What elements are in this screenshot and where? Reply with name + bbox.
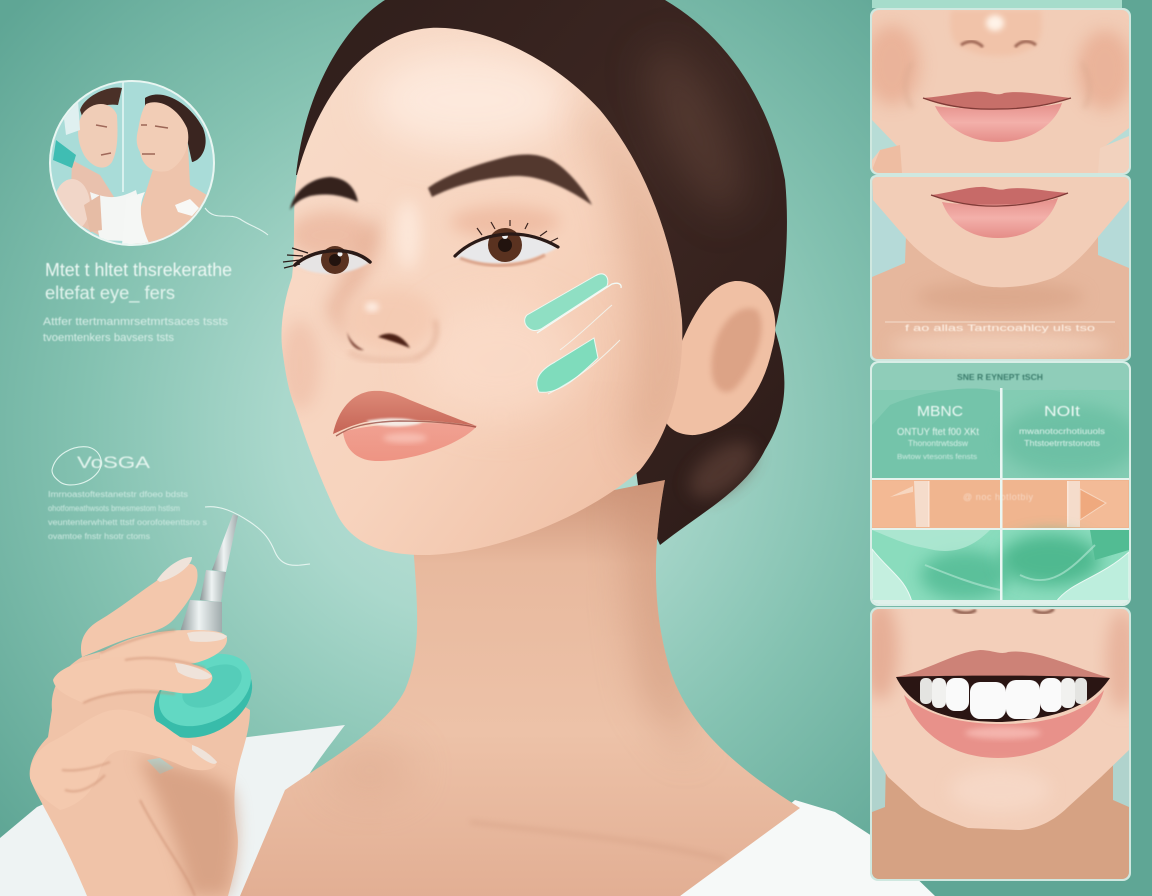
nostrils bbox=[961, 41, 1036, 47]
tile: right bbox=[1000, 390, 1140, 478]
hair highlight bbox=[630, 36, 760, 224]
center divider bbox=[1000, 388, 1002, 600]
inset: right woman features bbox=[141, 125, 168, 154]
collarbone bbox=[470, 822, 725, 860]
portrait of woman bbox=[230, 0, 830, 896]
connector line from pen bbox=[205, 507, 310, 565]
heading left: Mtet t hltet thsrekerathe bbox=[45, 260, 232, 280]
nose side shadow bbox=[325, 215, 379, 350]
chin glow bbox=[950, 768, 1050, 812]
lips bbox=[333, 391, 477, 461]
inset: applicator bbox=[53, 140, 76, 168]
nose bridge light bbox=[396, 200, 420, 270]
finger creases bbox=[62, 630, 205, 896]
cheek cream strip bbox=[525, 274, 621, 394]
body text left top bbox=[43, 316, 229, 344]
eye socket left bbox=[288, 211, 372, 259]
peach row: @ noc hotlotbiy bbox=[963, 492, 1034, 502]
palm shading bbox=[137, 757, 237, 896]
inner ear bbox=[712, 308, 762, 392]
inset: left woman neck bbox=[70, 161, 114, 236]
hand back and palm bbox=[30, 640, 250, 896]
cheek blush left bbox=[864, 25, 920, 105]
inset: right woman chest bbox=[135, 145, 212, 245]
tile: right: Thtstoetrrtrstonotts bbox=[1024, 438, 1100, 448]
neck highlight bbox=[890, 333, 1110, 357]
teal compact bbox=[140, 639, 266, 754]
inset: left hand bbox=[56, 179, 90, 226]
middle finger bbox=[53, 656, 212, 703]
inset: right woman face bbox=[137, 102, 188, 172]
eye: left bbox=[283, 246, 370, 274]
eyebrow: left bbox=[290, 177, 358, 210]
lip line bbox=[923, 98, 1071, 109]
annotation line bbox=[885, 321, 1115, 323]
logo mark bbox=[52, 447, 151, 485]
index finger bbox=[100, 630, 227, 670]
inset: right woman hand fingers bbox=[84, 195, 102, 232]
teal wedge right bbox=[1106, 128, 1129, 146]
neck shadow bbox=[625, 480, 690, 760]
heading left: eltefat eye_ fers bbox=[45, 283, 175, 304]
body text left lower: veuntenterwhhett ttstf oorofoteenttsno s bbox=[48, 518, 207, 527]
teal wedge left bbox=[872, 120, 898, 160]
heading left bbox=[45, 260, 232, 304]
inset: divider bbox=[122, 82, 124, 192]
panel: chin and neck bbox=[870, 175, 1131, 361]
inset: left woman body bbox=[90, 190, 137, 241]
panel: comparison bbox=[870, 361, 1140, 606]
tile: left bbox=[872, 388, 1000, 478]
cheek glow bbox=[443, 316, 572, 414]
left cheek blush bbox=[280, 320, 320, 410]
chin bbox=[872, 177, 1129, 287]
inset: left woman hair bbox=[80, 88, 122, 116]
lip line bbox=[931, 193, 1068, 206]
panel: smile bbox=[862, 600, 1138, 881]
smile creases bbox=[905, 62, 1090, 108]
eye: right bbox=[455, 220, 558, 265]
inset: white cloth bbox=[64, 102, 80, 135]
panel: lips top bbox=[864, 0, 1133, 175]
bun highlight bbox=[680, 431, 764, 509]
inset: collar patch bbox=[175, 199, 199, 216]
neck lump left bbox=[872, 145, 902, 173]
tile: right: NOIt bbox=[1044, 403, 1081, 420]
inset: right woman hair bbox=[145, 95, 206, 162]
eye socket right bbox=[450, 206, 560, 238]
thumb bbox=[81, 564, 198, 657]
ring finger bbox=[30, 710, 216, 810]
hair bbox=[296, 0, 787, 545]
neck lump right bbox=[1098, 136, 1129, 173]
neck bbox=[872, 235, 1129, 359]
body text left lower: Imrnoastoftestanetstr dfoeo bdsts bbox=[48, 490, 188, 499]
inset: left woman face bbox=[78, 104, 117, 168]
gap through fingers bbox=[147, 758, 174, 774]
cheek blush right bbox=[1077, 30, 1133, 110]
face bbox=[281, 28, 682, 555]
tile: left: Bwtow vtesonts fensts bbox=[897, 454, 978, 461]
comparison title: SNE R EYNEPT tSCH bbox=[957, 372, 1043, 382]
body text left lower: ovamtoe fnstr hsotr ctoms bbox=[48, 532, 150, 541]
upper lip bbox=[931, 187, 1068, 207]
hand with applicator bbox=[30, 514, 266, 896]
lower lip bbox=[942, 198, 1058, 238]
connector line from inset bbox=[205, 208, 268, 235]
nostrils bbox=[953, 609, 1054, 613]
annotation text: f ao allas Tartncoahlcy uls tso bbox=[905, 323, 1095, 333]
pen bbox=[180, 514, 238, 632]
body text left lower: ohotfomeathwsots bmesmestom hstlsm bbox=[48, 504, 180, 513]
nose bbox=[950, 10, 1042, 56]
ear bbox=[660, 281, 775, 435]
inset: left woman features bbox=[96, 125, 111, 155]
face bbox=[872, 609, 1129, 830]
hairline shadow bbox=[580, 110, 682, 454]
tile: right: mwanotocrhotiuuols bbox=[1019, 426, 1105, 436]
mouth interior bbox=[896, 676, 1110, 722]
cheek shade right bbox=[1106, 610, 1138, 710]
body text left top: Attfer ttertmanmrsetmrtsaces tssts bbox=[43, 316, 229, 328]
lower lip bbox=[935, 103, 1062, 142]
body text left lower bbox=[48, 490, 207, 541]
inset: right woman shirt bbox=[122, 192, 150, 245]
lower lip highlight bbox=[965, 727, 1041, 739]
nose highlight bbox=[986, 15, 1004, 31]
nose bbox=[347, 288, 437, 360]
teeth bbox=[920, 678, 1087, 719]
chest shadow bbox=[356, 758, 383, 779]
tile: left: Thonontrwtsdsw bbox=[908, 439, 968, 448]
texture row bbox=[872, 530, 1129, 605]
upper lip bbox=[923, 92, 1071, 110]
circular inset bbox=[49, 80, 215, 247]
neck and chest bbox=[230, 480, 830, 896]
peach row bbox=[872, 480, 1129, 528]
tile: left: ONTUY ftet f00 XKt bbox=[897, 427, 979, 438]
lower lip bbox=[904, 690, 1104, 758]
shirt: left shoulder bbox=[0, 725, 345, 896]
fingernails bbox=[157, 557, 227, 764]
logo mark: VoSGA bbox=[77, 453, 151, 472]
under chin shadow bbox=[915, 281, 1085, 313]
cheek shade left bbox=[862, 600, 898, 700]
forehead glow bbox=[370, 50, 570, 150]
tile: left: MBNC bbox=[917, 403, 963, 420]
neck bbox=[872, 760, 1129, 879]
body text left top: tvoemtenkers bavsers tsts bbox=[43, 332, 174, 344]
eyebrow: right bbox=[428, 155, 592, 205]
upper lip bbox=[896, 650, 1110, 681]
shirt: right shoulder bbox=[680, 800, 935, 896]
